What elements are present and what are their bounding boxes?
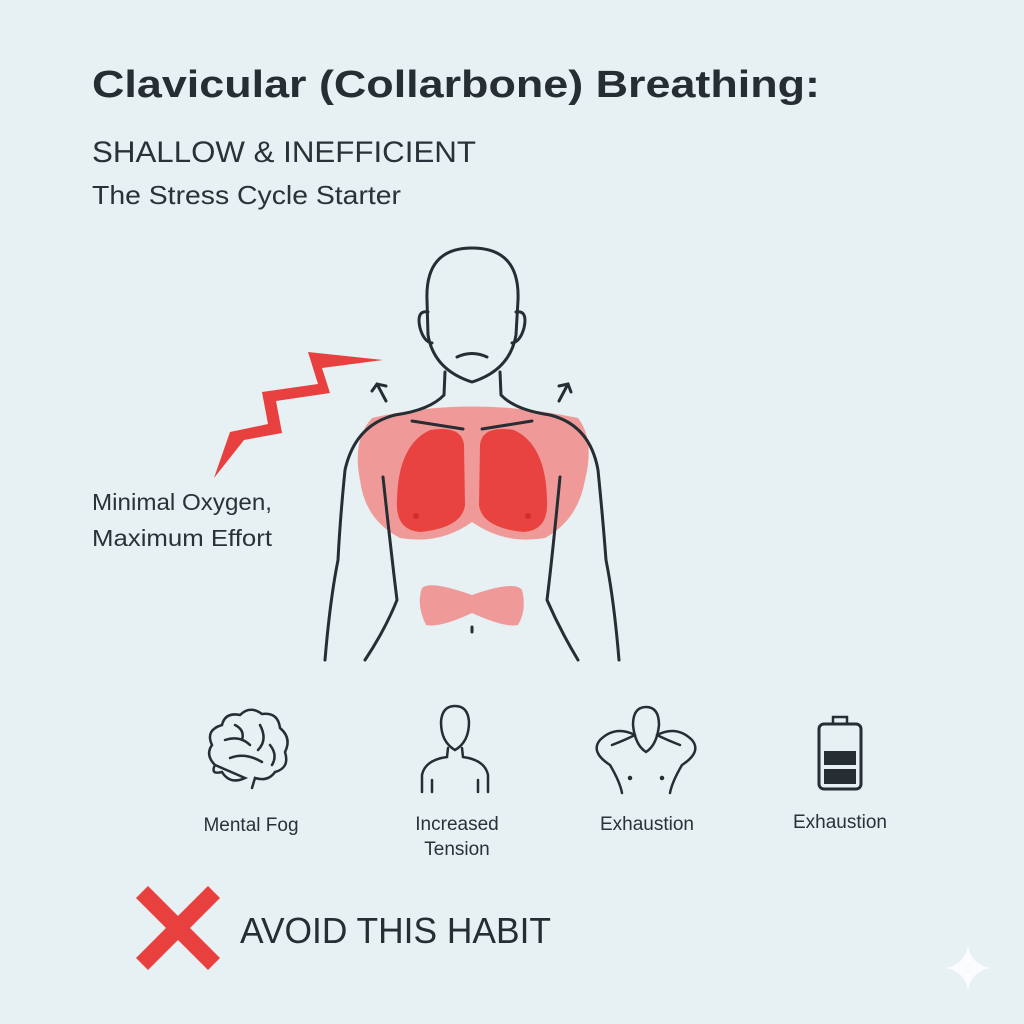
icon: battery [819, 717, 861, 789]
icon labels: Increased [415, 814, 499, 835]
callout text [92, 489, 273, 551]
tagline: The Stress Cycle Starter [92, 180, 401, 210]
red chest highlight [358, 406, 589, 626]
title: Clavicular (Collarbone) Breathing: [92, 64, 820, 106]
subtitle: SHALLOW & INEFFICIENT [92, 136, 476, 169]
icon labels: Exhaustion [793, 812, 887, 833]
callout text: Maximum Effort [92, 525, 273, 551]
body figure [325, 248, 619, 660]
avoid text: AVOID THIS HABIT [240, 910, 551, 951]
icon: sparkle [945, 945, 991, 991]
icon: red X [142, 892, 214, 964]
lightning bolt [214, 352, 383, 478]
icon labels: Exhaustion [600, 814, 694, 835]
icon labels: Mental Fog [203, 815, 299, 836]
icon: person tension [422, 706, 488, 792]
icon: hands behind head [597, 707, 695, 793]
icon labels [203, 812, 887, 860]
icon labels: Tension [424, 839, 490, 860]
icon: brain [209, 710, 288, 788]
callout text: Minimal Oxygen, [92, 489, 272, 515]
